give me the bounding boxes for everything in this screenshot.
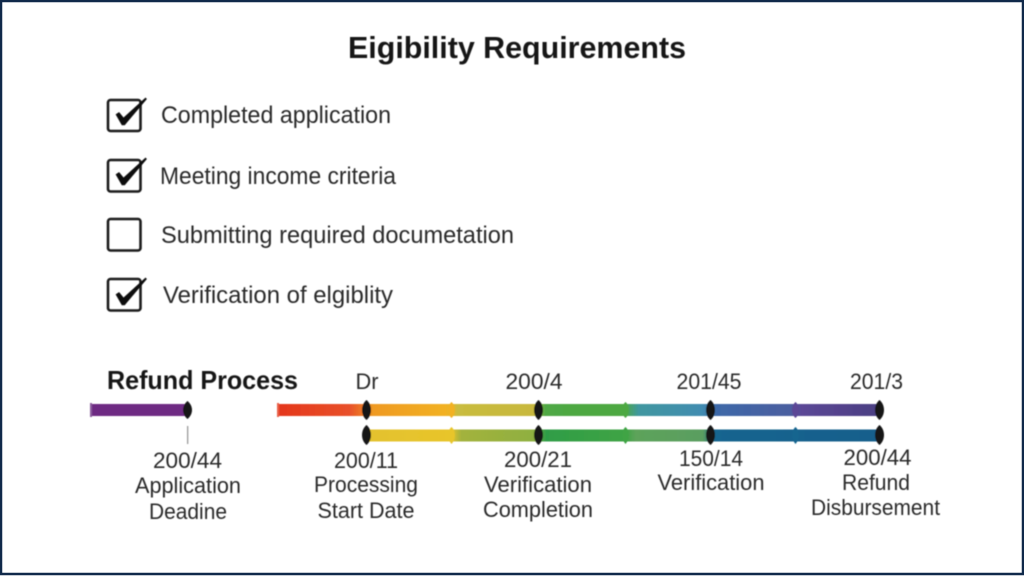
label: application deadline: Application (135, 473, 241, 498)
top date labels: Dr (356, 369, 378, 394)
top date labels: 200/4 (506, 369, 562, 394)
icon: checked box 1 (108, 98, 146, 131)
icon: checked box 3 (108, 278, 146, 310)
item: verification of eligibility: Verification of elgiblity (163, 282, 393, 309)
label: verification: Verification (658, 470, 764, 495)
icon: checked box 2 (108, 158, 146, 192)
item: meeting income criteria: Meeting income criteria (160, 163, 397, 190)
label: processing start date: 200/11 (334, 448, 398, 473)
label: processing start date: Processing (314, 472, 418, 497)
bar: application segment (90, 403, 187, 417)
icon: empty box (108, 219, 140, 250)
item: submitting required documentation: Submitting required documetation (161, 222, 514, 249)
label: application deadline: Deadine (149, 499, 227, 524)
title: Eigibility Requirements (348, 30, 686, 65)
label: verification completion (483, 447, 593, 522)
panel: eligibility checklist (108, 98, 514, 310)
label: refund disbursement: Disbursement (811, 495, 940, 520)
label: verification completion: 200/21 (504, 447, 572, 472)
infographic content (90, 30, 940, 524)
small stage markers (448, 402, 799, 444)
label: processing start date (314, 448, 418, 523)
label: verification: 150/14 (679, 446, 743, 471)
label: verification completion: Verification (484, 472, 592, 497)
top date labels (356, 369, 903, 394)
label: application deadline (135, 448, 241, 524)
label: refund disbursement: Refund (842, 470, 910, 495)
label: refund disbursement: 200/44 (844, 445, 912, 470)
label: verification (658, 446, 764, 495)
heading: refund process: Refund Process (107, 365, 298, 395)
panel: refund timeline (90, 369, 940, 524)
bar: lower rainbow track (366, 430, 880, 442)
marker: application deadline (183, 401, 192, 419)
tick: deadline leader (187, 426, 188, 444)
black milestone markers (362, 400, 884, 445)
top date labels: 201/45 (676, 369, 742, 394)
label: refund disbursement (811, 445, 940, 520)
item: completed application: Completed application (161, 102, 391, 129)
label: application deadline: 200/44 (153, 448, 222, 473)
top date labels: 201/3 (850, 369, 903, 394)
label: verification completion: Completion (483, 497, 593, 522)
label: processing start date: Start Date (318, 498, 414, 523)
bar: upper rainbow track (277, 403, 880, 417)
